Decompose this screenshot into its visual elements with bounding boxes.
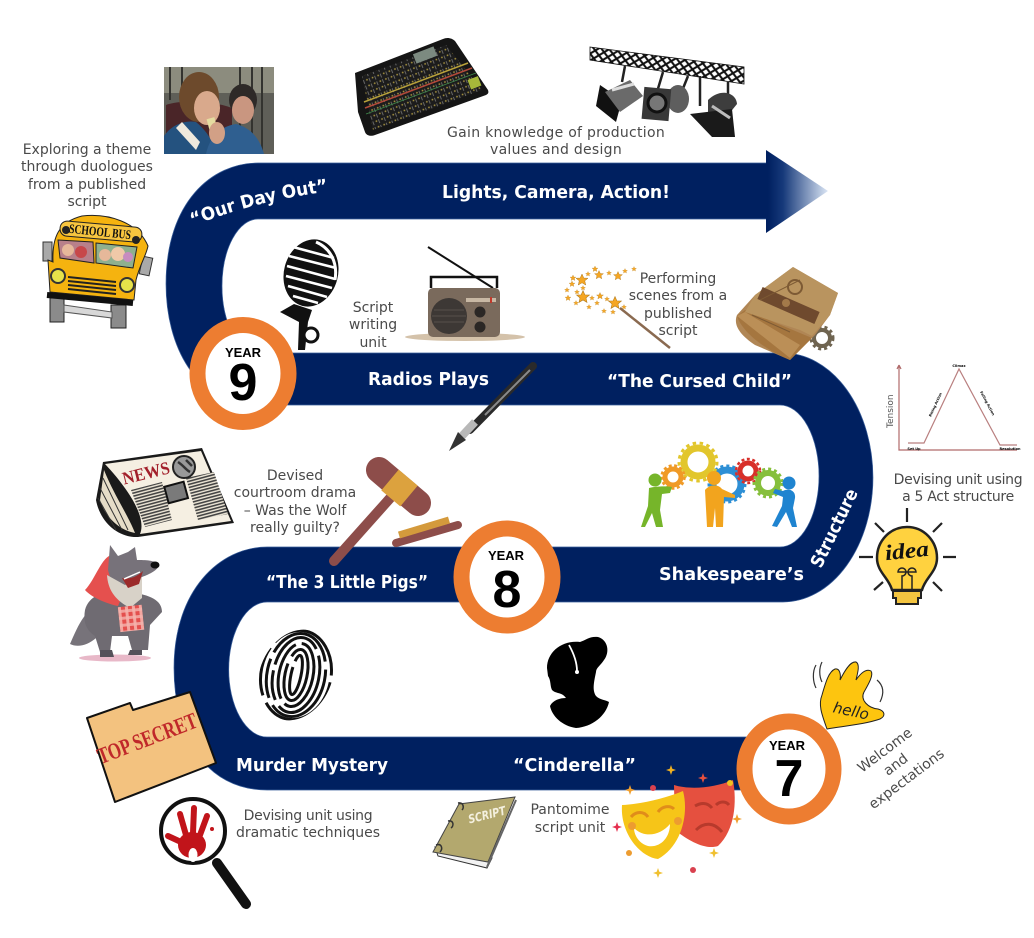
badge: year 7: [744, 722, 834, 816]
badge: year 7: 7: [775, 750, 803, 808]
heading: Structure: Structure: [807, 486, 863, 571]
text: performing scenes: published: [644, 306, 712, 322]
label: SCRIPT: SCRIPT: [467, 803, 508, 826]
heading: Lights, Camera, Action!: Lights, Camera, Action!: [442, 182, 670, 203]
text: production values: Gain knowledge of production: [447, 125, 665, 141]
icon: mixing desk: [355, 38, 488, 136]
text: Exploring a theme: script: [67, 194, 107, 210]
icon: magnifying glass: [161, 799, 246, 904]
text: devised courtroom drama: – Was the Wolf: [244, 503, 347, 519]
text: devising 5 act: Devising unit using: [894, 472, 1022, 488]
label: tension axis: Tension: [886, 394, 896, 429]
text: devised courtroom drama: really guilty?: [250, 520, 340, 536]
text: welcome and expectations: Welcome: [855, 725, 916, 776]
badge: year 9: [198, 325, 288, 422]
badge: year 7: YEAR: [769, 738, 806, 753]
photo: two boys: [164, 67, 274, 154]
label: idea: idea: [884, 536, 930, 565]
label: NEWS: NEWS: [120, 457, 172, 489]
badge: year 8: [462, 528, 552, 626]
heading: Murder Mystery: Murder Mystery: [236, 755, 388, 776]
text: script writing unit: unit: [359, 335, 387, 351]
text: production values: values and design: [490, 142, 622, 158]
icon: hello hand: [813, 662, 884, 729]
label: resolution: Resolution: [999, 447, 1021, 451]
heading: The Cursed Child: “The Cursed Child”: [607, 371, 792, 392]
icon: old book: [736, 267, 838, 360]
icon: cinderella silhouette: [547, 637, 609, 728]
heading: Radios Plays: Radios Plays: [368, 369, 489, 390]
icon: school bus: [43, 215, 153, 328]
label: climax: Climax: [952, 364, 966, 368]
label: set up: Set Up: [907, 447, 921, 451]
text: welcome and expectations: expectations: [866, 746, 948, 813]
text: devising 5 act: a 5 Act structure: [902, 489, 1014, 505]
icon: wolf: [70, 545, 162, 662]
text: Exploring a theme: through duologues: [21, 159, 153, 175]
text: Exploring a theme: from a published: [28, 177, 146, 193]
text: performing scenes: Performing: [640, 271, 716, 287]
icon: microphone: [276, 233, 346, 350]
heading: Cinderella: “Cinderella”: [513, 755, 636, 776]
text: devised courtroom drama: courtroom drama: [234, 485, 356, 501]
badge: year 9: 9: [229, 354, 257, 412]
text: pantomime script unit: Pantomime: [530, 802, 610, 818]
serpentine road: [166, 150, 873, 790]
icon: gavel: [334, 470, 458, 561]
label: hello: hello: [831, 698, 871, 724]
icon: magic wand and stars: [564, 266, 670, 348]
badge: year 9: YEAR: [225, 345, 262, 360]
heading: Our Day Out: “Our Day Out”: [190, 178, 325, 220]
badge: year 8: YEAR: [488, 548, 525, 563]
icon: fingerprint: [258, 630, 333, 720]
text: pantomime script unit: script unit: [535, 820, 606, 836]
label: TOP SECRET: TOP SECRET: [94, 708, 201, 769]
label: falling action: Falling Action: [979, 391, 996, 417]
label: SCHOOL BUS: SCHOOL BUS: [68, 221, 132, 242]
text: performing scenes: script: [658, 323, 698, 339]
text: script writing unit: Script: [353, 300, 394, 316]
icon: script booklet: [433, 797, 516, 868]
icon: newspaper: [96, 448, 234, 537]
heading: The 3 Little Pigs: “The 3 Little Pigs”: [266, 572, 428, 593]
icon: pen: [449, 366, 533, 451]
text: script writing unit: writing: [349, 317, 397, 333]
icon: radio: [405, 247, 525, 341]
icon: top secret folder: [87, 692, 216, 802]
heading: Shakespeare's: Shakespeare’s: [659, 564, 804, 585]
text: devising dramatic techniques: Devising unit using: [244, 808, 372, 824]
icon: idea light bulb: [859, 508, 956, 604]
text: Exploring a theme: Exploring a theme: [23, 142, 151, 158]
icon: theatre masks: [612, 765, 742, 878]
chart: five act tension graph: [886, 364, 1021, 451]
text: welcome and expectations: and: [881, 751, 911, 779]
text: performing scenes: scenes from a: [629, 288, 727, 304]
text: devised courtroom drama: Devised: [267, 468, 323, 484]
icon: people with gears: [641, 443, 797, 527]
icon: stage lights: [590, 47, 744, 137]
badge: year 8: 8: [493, 561, 521, 619]
arrow head: [766, 150, 828, 233]
text: devising dramatic techniques: dramatic techniques: [236, 825, 380, 841]
label: rising action: Rising Action: [928, 392, 943, 417]
